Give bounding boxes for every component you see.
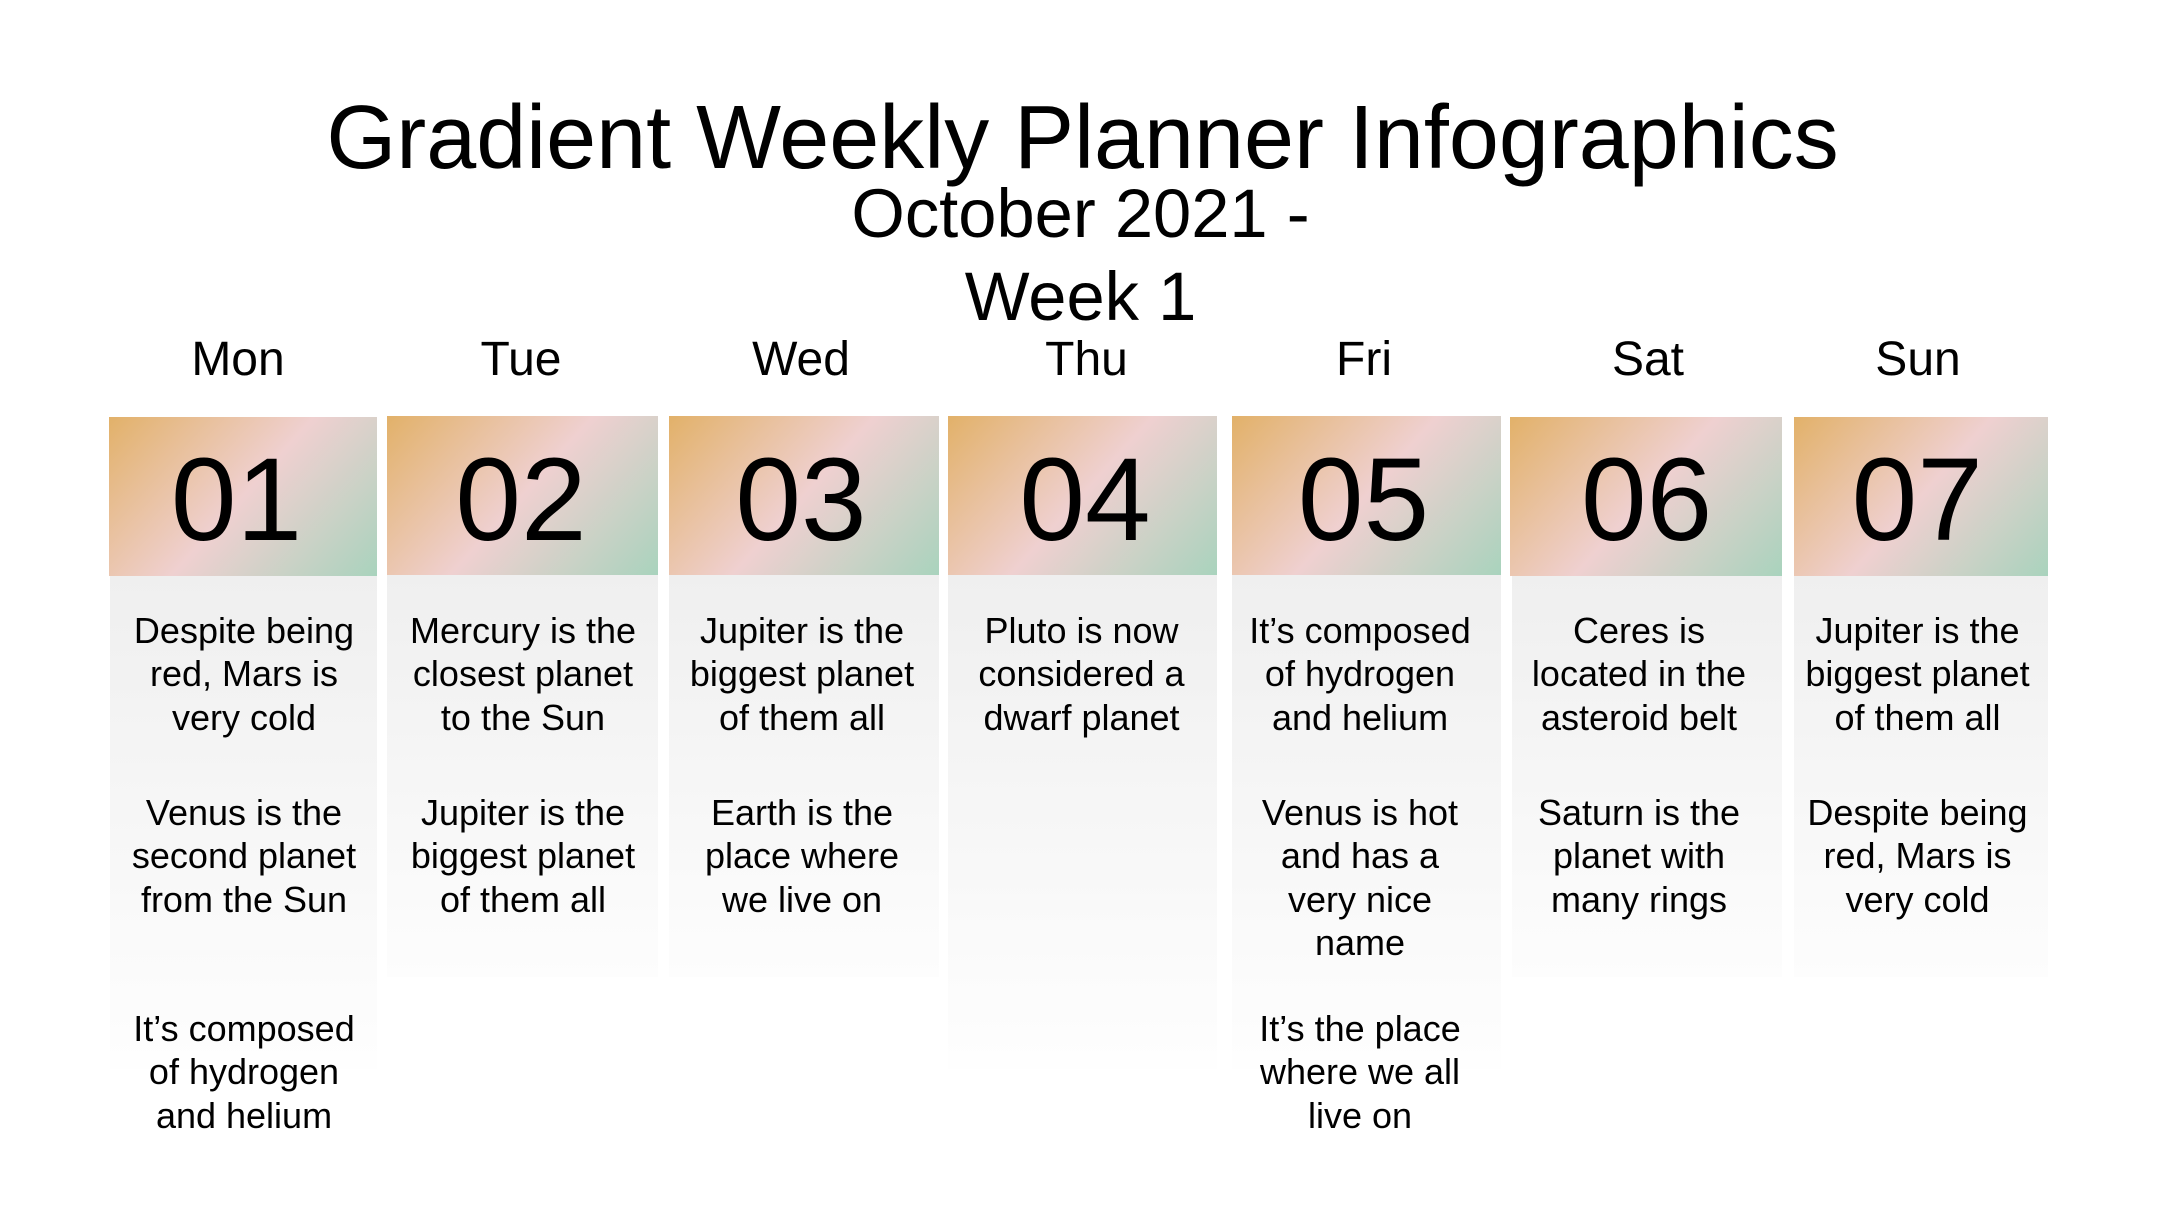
date number: 06: 06 (1581, 434, 1712, 566)
text: Sunday task 2 (1807, 792, 2028, 920)
subtitle: month and week (851, 175, 1310, 335)
text: Friday task 3: live on (1308, 1095, 1412, 1136)
text: Monday task 2: from the Sun (141, 879, 347, 920)
text: Thursday task 1: dwarf planet (983, 697, 1180, 738)
day label: Sun: Sun (1875, 333, 1961, 386)
day label: Wed: Wed (752, 333, 850, 386)
text: Sunday task 2: very cold (1845, 879, 1990, 920)
panel: Thursday tasks background (948, 575, 1217, 1069)
text: Wednesday task 1 (690, 610, 914, 738)
column: Thursday (948, 333, 1217, 836)
text: Thursday task 1: considered a (978, 653, 1185, 694)
text: Saturday task 1: Ceres is (1573, 610, 1705, 651)
text: Tuesday task 1: to the Sun (441, 697, 605, 738)
date number: 05: 05 (1298, 434, 1429, 566)
date number: 03: 03 (735, 434, 867, 566)
column: Friday (1232, 333, 1501, 1136)
text: Friday task 3: It’s the place (1259, 1008, 1461, 1049)
text: Friday task 2: name (1315, 922, 1405, 963)
text: Friday task 1 (1249, 610, 1471, 738)
date number: 01: 01 (171, 434, 302, 566)
text: Monday task 1: Despite being (134, 610, 354, 651)
text: Saturday task 1 (1532, 610, 1746, 738)
column: Saturday (1510, 333, 1782, 920)
text: Saturday task 2: Saturn is the (1538, 792, 1740, 833)
text: Wednesday task 2 (705, 792, 899, 920)
day label: Thu: Thu (1045, 333, 1128, 386)
text: Saturday task 1: asteroid belt (1541, 697, 1737, 738)
text: Wednesday task 1: biggest planet (690, 653, 914, 694)
panel: Wednesday tasks background (669, 575, 939, 977)
text: Monday task 1: very cold (172, 697, 316, 738)
text: Wednesday task 1: of them all (719, 697, 885, 738)
column: Sunday (1794, 333, 2048, 920)
text: Sunday task 1: biggest planet (1805, 653, 2030, 694)
text: Friday task 3: where we all (1260, 1051, 1460, 1092)
text: Friday task 1: of hydrogen (1265, 653, 1455, 694)
text: Tuesday task 2: biggest planet (411, 835, 635, 876)
subtitle: month and week: Week 1 (965, 258, 1196, 335)
text: Sunday task 1: of them all (1834, 697, 2001, 738)
text: Thursday task 1: Pluto is now (984, 610, 1179, 651)
text: Friday task 2 (1262, 792, 1458, 963)
text: Saturday task 2: planet with (1553, 835, 1725, 876)
text: Sunday task 1 (1805, 610, 2030, 738)
text: Thursday task 1 (978, 610, 1185, 738)
text: Sunday task 2: red, Mars is (1823, 835, 2012, 876)
subtitle: month and week: October 2021 - (851, 175, 1310, 252)
date card: 03 (669, 416, 939, 575)
text: Tuesday task 2: Jupiter is the (421, 792, 625, 833)
text: Friday task 3 (1259, 1008, 1461, 1136)
text: Wednesday task 2: place where (705, 835, 899, 876)
column: Tuesday (387, 333, 658, 920)
text: Monday task 3: of hydrogen (149, 1051, 339, 1092)
text: Friday task 1: It’s composed (1249, 610, 1471, 651)
text: Wednesday task 1: Jupiter is the (700, 610, 904, 651)
text: Sunday task 1: Jupiter is the (1815, 610, 2020, 651)
text: Monday task 3: and helium (156, 1095, 332, 1136)
text: Saturday task 2 (1538, 792, 1740, 920)
text: Friday task 1: and helium (1272, 697, 1448, 738)
panel: Saturday tasks background (1512, 576, 1782, 977)
date number: 04: 04 (1019, 434, 1151, 566)
text: Wednesday task 2: we live on (722, 879, 882, 920)
day label: Mon: Mon (191, 333, 285, 386)
text: Monday task 1 (134, 610, 354, 738)
text: Monday task 2: second planet (132, 835, 356, 876)
date card: 07 (1794, 417, 2048, 576)
text: Saturday task 1: located in the (1532, 653, 1746, 694)
text: Monday task 2: Venus is the (146, 792, 342, 833)
text: Monday task 2 (132, 792, 356, 920)
date card: 02 (387, 416, 658, 575)
text: Tuesday task 2 (411, 792, 635, 920)
text: Monday task 3 (133, 1008, 355, 1136)
panel: Tuesday tasks background (387, 575, 658, 977)
text: Tuesday task 1 (410, 610, 636, 738)
column: Monday (109, 333, 377, 1136)
panel: Sunday tasks background (1794, 576, 2048, 977)
text: Tuesday task 1: closest planet (413, 653, 633, 694)
text: Friday task 2: and has a (1281, 835, 1439, 876)
day label: Fri: Fri (1336, 333, 1392, 386)
text: Monday task 1: red, Mars is (150, 653, 338, 694)
text: Friday task 2: Venus is hot (1262, 792, 1458, 833)
text: Tuesday task 2: of them all (440, 879, 606, 920)
day label: Tue: Tue (481, 333, 561, 386)
text: Wednesday task 2: Earth is the (711, 792, 893, 833)
text: Monday task 3: It’s composed (133, 1008, 355, 1049)
text: Saturday task 2: many rings (1551, 879, 1727, 920)
date card: 01 (109, 417, 377, 576)
date card: 06 (1510, 417, 1782, 576)
panel: Friday tasks background (1232, 575, 1501, 1069)
date card: 04 (948, 416, 1217, 575)
column: Wednesday (669, 333, 939, 920)
date card: 05 (1232, 416, 1501, 575)
panel: Monday tasks background (110, 576, 377, 1069)
date number: 07: 07 (1852, 434, 1983, 566)
date number: 02: 02 (455, 434, 587, 566)
title: Gradient Weekly Planner Infographics (326, 88, 1839, 188)
text: Tuesday task 1: Mercury is the (410, 610, 636, 651)
text: Sunday task 2: Despite being (1807, 792, 2028, 833)
text: Friday task 2: very nice (1288, 879, 1432, 920)
day label: Sat: Sat (1612, 333, 1684, 386)
